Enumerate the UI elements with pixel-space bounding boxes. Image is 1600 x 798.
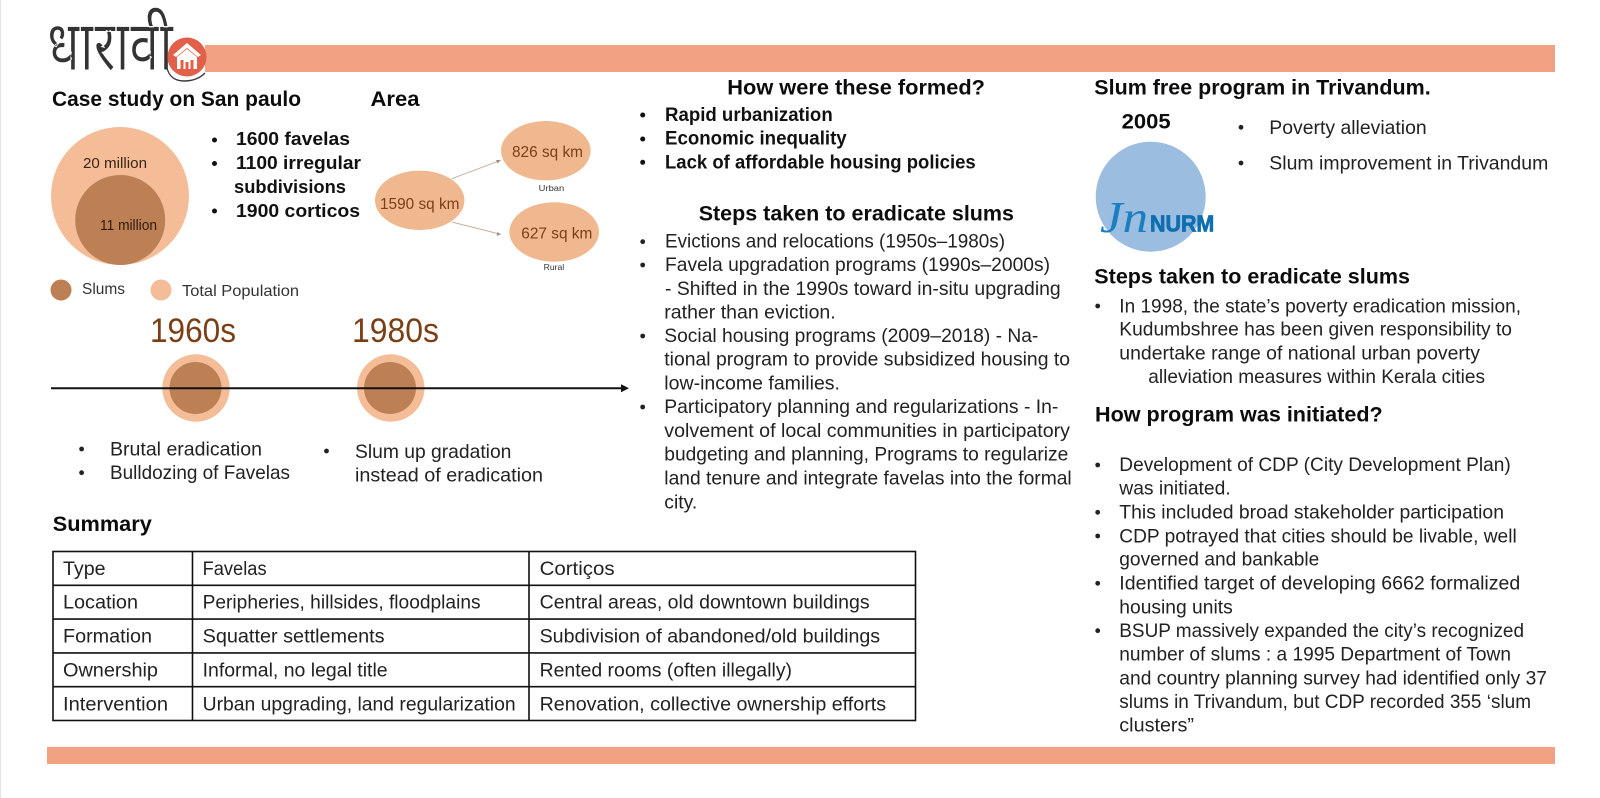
rural area node xyxy=(509,202,599,272)
table row: Ownership: Informal, no legal title xyxy=(203,661,388,682)
San Paulo steps list: Participatory planning and regularizations - In- xyxy=(664,396,1058,418)
table row: Ownership: Ownership xyxy=(63,661,158,682)
icon: JnNURM logo: Jn xyxy=(1100,193,1148,242)
urban area node: 826 sq km xyxy=(512,144,583,161)
table row: Formation xyxy=(63,627,880,648)
arrow: total to rural xyxy=(452,222,501,236)
table row: Ownership: Rented rooms (often illegally) xyxy=(540,661,792,682)
program initiation list: Development of CDP (City Development Plan) xyxy=(1119,454,1511,476)
rural area node: 627 sq km xyxy=(521,226,592,243)
rural area node: Rural xyxy=(544,262,564,272)
heading: Summary: Summary xyxy=(53,512,152,536)
arrow: total to urban xyxy=(452,160,501,179)
table row: Intervention xyxy=(63,695,886,716)
heading: Case study on San paulo: Case study on San paulo xyxy=(52,87,301,111)
program initiation list: CDP potrayed that cities should be livable, well xyxy=(1119,525,1517,547)
table row: Type xyxy=(63,559,615,580)
heading: How program was initiated?: How program was initiated? xyxy=(1095,403,1383,427)
summary table xyxy=(53,552,916,720)
program initiation list: and country planning survey had identified only 37 xyxy=(1119,667,1547,689)
heading: Steps taken to eradicate slums (Trivandum): Steps taken to eradicate slums xyxy=(1094,264,1410,288)
table row: Ownership xyxy=(63,661,792,682)
table row: Type: Type xyxy=(63,559,106,580)
causes list xyxy=(640,104,976,173)
favela statistics list xyxy=(212,128,362,221)
program goals list: Poverty alleviation xyxy=(1269,117,1427,139)
causes list: Economic inequality xyxy=(665,128,847,150)
favela statistics list: subdivisions xyxy=(234,176,346,197)
Trivandum steps text xyxy=(1095,295,1521,388)
San Paulo steps list: low-income families. xyxy=(664,372,840,394)
heading: Steps taken to eradicate slums (San Paulo): Steps taken to eradicate slums xyxy=(699,202,1014,226)
label: 11 million: 11 million xyxy=(100,218,157,234)
San Paulo steps list: rather than eviction. xyxy=(664,301,836,323)
table row: Location: Central areas, old downtown buildings xyxy=(540,593,870,614)
timeline 1960s xyxy=(150,312,236,422)
logo wordmark: धारावी xyxy=(47,7,174,85)
San Paulo steps list: volvement of local communities in participatory xyxy=(664,420,1070,442)
table row: Formation: Squatter settlements xyxy=(203,627,385,648)
bottom footer bar xyxy=(47,747,1555,764)
table row: Location: Location xyxy=(63,593,138,614)
table row: Intervention: Intervention xyxy=(63,695,168,716)
table row: Type: Favelas xyxy=(203,559,267,580)
1980s notes: instead of eradication xyxy=(355,465,543,487)
total area node: 1590 sq km xyxy=(380,196,460,213)
total area node xyxy=(375,171,464,230)
table row: Intervention: Renovation, collective ownership efforts xyxy=(540,695,886,716)
table row: Location: Peripheries, hillsides, floodplains xyxy=(203,593,481,614)
program initiation list: slums in Trivandum, but CDP recorded 355 ‘slum xyxy=(1119,691,1531,713)
program goals list: Slum improvement in Trivandum xyxy=(1269,152,1548,174)
San Paulo steps list: city. xyxy=(664,491,697,513)
program initiation list xyxy=(1095,454,1547,737)
timeline 1980s: 1980s xyxy=(352,312,439,350)
favela statistics list: 1600 favelas xyxy=(236,128,350,149)
heading: Slum free program in Trivandum: Slum free program in Trivandum. xyxy=(1094,75,1431,99)
logo: Dharavi wordmark with house badge xyxy=(47,7,206,85)
Trivandum steps text: Kudumbshree has been given responsibility to xyxy=(1119,319,1512,341)
Trivandum steps text: alleviation measures within Kerala cities xyxy=(1148,366,1485,388)
San Paulo steps list: - Shifted in the 1990s toward in-situ upgrading xyxy=(665,278,1061,300)
program initiation list: Identified target of developing 6662 formalized xyxy=(1119,573,1520,595)
program initiation list: was initiated. xyxy=(1118,478,1231,500)
logo swoosh xyxy=(166,62,205,81)
timeline 1980s xyxy=(352,312,439,422)
program initiation list: clusters” xyxy=(1119,715,1194,737)
table row: Type: Cortiços xyxy=(540,559,615,580)
year label: 2005: 2005 xyxy=(1122,109,1171,133)
Trivandum steps text: In 1998, the state’s poverty eradication mission, xyxy=(1119,295,1521,317)
table row: Location xyxy=(63,593,870,614)
top header bar xyxy=(205,45,1555,72)
table row: Formation: Formation xyxy=(63,627,152,648)
San Paulo steps list: land tenure and integrate favelas into the formal xyxy=(664,467,1072,489)
label: 20 million: 20 million xyxy=(83,156,147,172)
icon: house badge xyxy=(168,38,206,76)
icon: JnNURM logo: NURM xyxy=(1150,211,1214,237)
program initiation list: number of slums : a 1995 Department of Town xyxy=(1119,644,1511,666)
San Paulo steps list: Social housing programs (2009–2018) - Na- xyxy=(664,325,1038,347)
program initiation list: This included broad stakeholder participation xyxy=(1119,501,1504,523)
1960s notes xyxy=(79,439,290,484)
favela statistics list: 1100 irregular xyxy=(236,152,362,173)
urban area node: Urban xyxy=(539,183,564,193)
arrow: timeline axis xyxy=(51,384,629,392)
urban area node xyxy=(501,121,591,193)
1980s notes xyxy=(324,441,543,487)
population circle chart xyxy=(51,127,189,265)
San Paulo steps list xyxy=(640,230,1072,513)
icon: JnNURM logo xyxy=(1096,142,1214,252)
causes list: Lack of affordable housing policies xyxy=(665,151,976,173)
table row: Intervention: Urban upgrading, land regularization xyxy=(203,695,516,716)
1980s notes: Slum up gradation xyxy=(355,441,511,463)
causes list: Rapid urbanization xyxy=(665,104,833,126)
legend: Total Population xyxy=(182,283,299,300)
slums circle xyxy=(75,175,165,265)
program initiation list: BSUP massively expanded the city’s recognized xyxy=(1119,620,1524,642)
heading: Area: Area xyxy=(370,87,421,111)
program initiation list: governed and bankable xyxy=(1119,549,1319,571)
program goals list xyxy=(1239,117,1548,174)
total population circle xyxy=(51,127,189,265)
legend: Slums xyxy=(82,281,125,298)
timeline xyxy=(51,312,629,422)
San Paulo steps list: Favela upgradation programs (1990s–2000s) xyxy=(665,254,1050,276)
1960s notes: Brutal eradication xyxy=(110,439,262,461)
timeline 1960s: 1960s xyxy=(150,312,236,350)
San Paulo steps list: budgeting and planning, Programs to regularize xyxy=(664,444,1068,466)
program initiation list: housing units xyxy=(1119,596,1233,618)
1960s notes: Bulldozing of Favelas xyxy=(110,462,290,484)
area diagram xyxy=(375,121,599,272)
favela statistics list: 1900 corticos xyxy=(236,200,360,221)
heading: How were these formed?: How were these formed? xyxy=(727,75,985,99)
San Paulo steps list: Evictions and relocations (1950s–1980s) xyxy=(665,230,1005,252)
San Paulo steps list: tional program to provide subsidized housing to xyxy=(664,349,1070,371)
Trivandum steps text: undertake range of national urban poverty xyxy=(1119,342,1480,364)
table row: Formation: Subdivision of abandoned/old buildings xyxy=(540,627,880,648)
legend xyxy=(50,280,299,300)
